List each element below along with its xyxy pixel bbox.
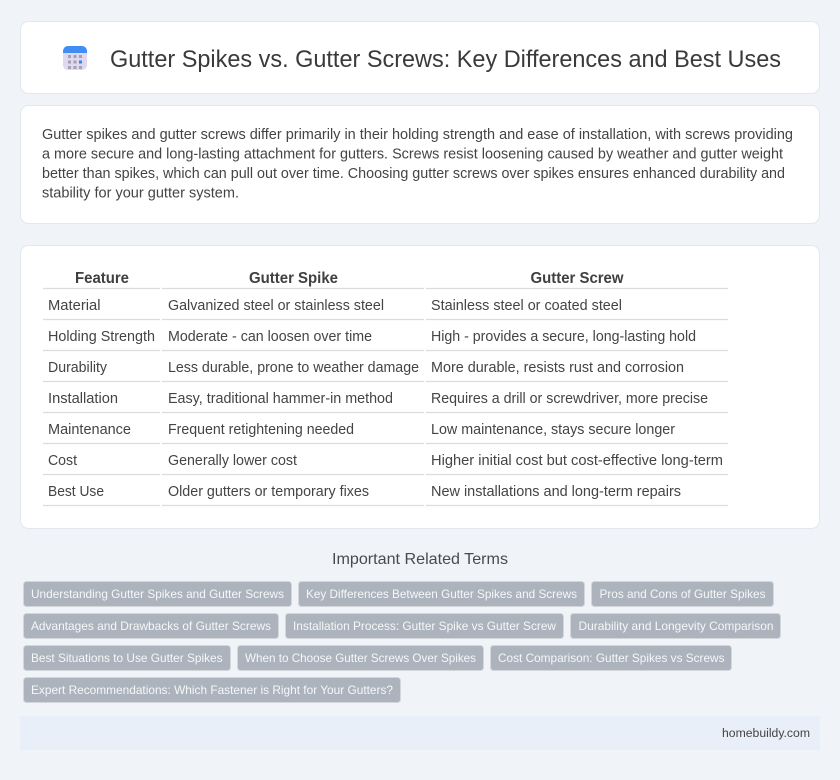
panel: page header (20, 22, 820, 94)
table row: maintenance: Frequent retightening needed (168, 422, 354, 438)
text block: introduction paragraph: Gutter spikes and gutter screws differ primarily in their holding strength and ease of installation, with screws providing (42, 127, 793, 143)
table row: holding strength: Holding Strength (48, 329, 155, 345)
table row: maintenance: Low maintenance, stays secure longer (431, 422, 675, 438)
table row: durability: More durable, resists rust and corrosion (431, 360, 684, 376)
table row: best use: Best Use (48, 484, 104, 500)
table row: installation (48, 391, 708, 407)
tag: Best Situations to Use Gutter Spikes (31, 651, 222, 665)
table row: durability: Durability (48, 360, 108, 376)
table row: maintenance (48, 422, 675, 438)
tag (490, 646, 732, 670)
title: Gutter Spikes vs. Gutter Screws: Key Differences and Best Uses (110, 46, 781, 73)
tag: When to Choose Gutter Screws Over Spikes (245, 651, 476, 665)
tag list: related terms (24, 582, 780, 702)
footer source text: homebuildy.com (722, 726, 810, 740)
tag: Advantages and Drawbacks of Gutter Screws (31, 619, 271, 633)
table row: cost: Higher initial cost but cost-effective long-term (431, 453, 723, 469)
table row: best use: Older gutters or temporary fixes (168, 484, 369, 500)
table row: best use (48, 484, 681, 500)
text block: introduction paragraph (42, 127, 793, 202)
table row: cost: Generally lower cost (168, 453, 297, 469)
tag (24, 678, 400, 702)
table row: holding strength (48, 329, 696, 345)
table header row: Gutter Screw (530, 270, 624, 287)
tag (24, 614, 278, 638)
text block: introduction paragraph: a more secure and long-lasting attachment for gutters. Screws resist loosening caused by weather and gutter weight (42, 146, 783, 162)
tag: Understanding Gutter Spikes and Gutter Screws (31, 587, 284, 601)
tag (24, 582, 292, 606)
tag (570, 614, 780, 638)
tag (238, 646, 484, 670)
table row: installation: Requires a drill or screwdriver, more precise (431, 391, 708, 407)
table row: material: Material (48, 298, 100, 314)
table header row: Gutter Spike (249, 270, 338, 287)
tag: Durability and Longevity Comparison (578, 619, 774, 633)
table row: maintenance: Maintenance (48, 422, 131, 438)
tag: Expert Recommendations: Which Fastener is Right for Your Gutters? (31, 683, 393, 697)
text block: introduction paragraph: stability for your gutter system. (42, 186, 239, 202)
panel: introduction (20, 106, 820, 224)
table row: cost (48, 453, 723, 469)
table row: best use: New installations and long-term repairs (431, 484, 681, 500)
table row: holding strength: High - provides a secure, long-lasting hold (431, 329, 696, 345)
tag (298, 582, 584, 606)
tag: Pros and Cons of Gutter Spikes (600, 587, 766, 601)
tag (286, 614, 564, 638)
table header row: Feature (75, 270, 129, 287)
table row: durability (48, 360, 684, 376)
table row: material: Stainless steel or coated steel (431, 298, 622, 314)
text block: introduction paragraph: better than spikes, which can pull out over time. Choosing gutter screws over spikes ensures enhanced durability and (42, 166, 785, 182)
table row: material (48, 298, 622, 314)
table row: durability: Less durable, prone to weather damage (168, 360, 419, 376)
table row: cost: Cost (48, 453, 77, 469)
tag: Key Differences Between Gutter Spikes and Screws (306, 587, 577, 601)
heading: related terms: Important Related Terms (332, 551, 508, 568)
icon: calendar (63, 46, 87, 70)
tag: Installation Process: Gutter Spike vs Gutter Screw (293, 619, 556, 633)
tag (24, 646, 230, 670)
footer bar (20, 716, 820, 750)
table row: installation: Easy, traditional hammer-in method (168, 391, 393, 407)
panel: comparison table (20, 246, 820, 528)
table row: installation: Installation (48, 391, 118, 407)
table header row (75, 270, 624, 287)
tag: Cost Comparison: Gutter Spikes vs Screws (498, 651, 724, 665)
tag (592, 582, 774, 606)
table row: material: Galvanized steel or stainless steel (168, 298, 384, 314)
table row: holding strength: Moderate - can loosen over time (168, 329, 372, 345)
